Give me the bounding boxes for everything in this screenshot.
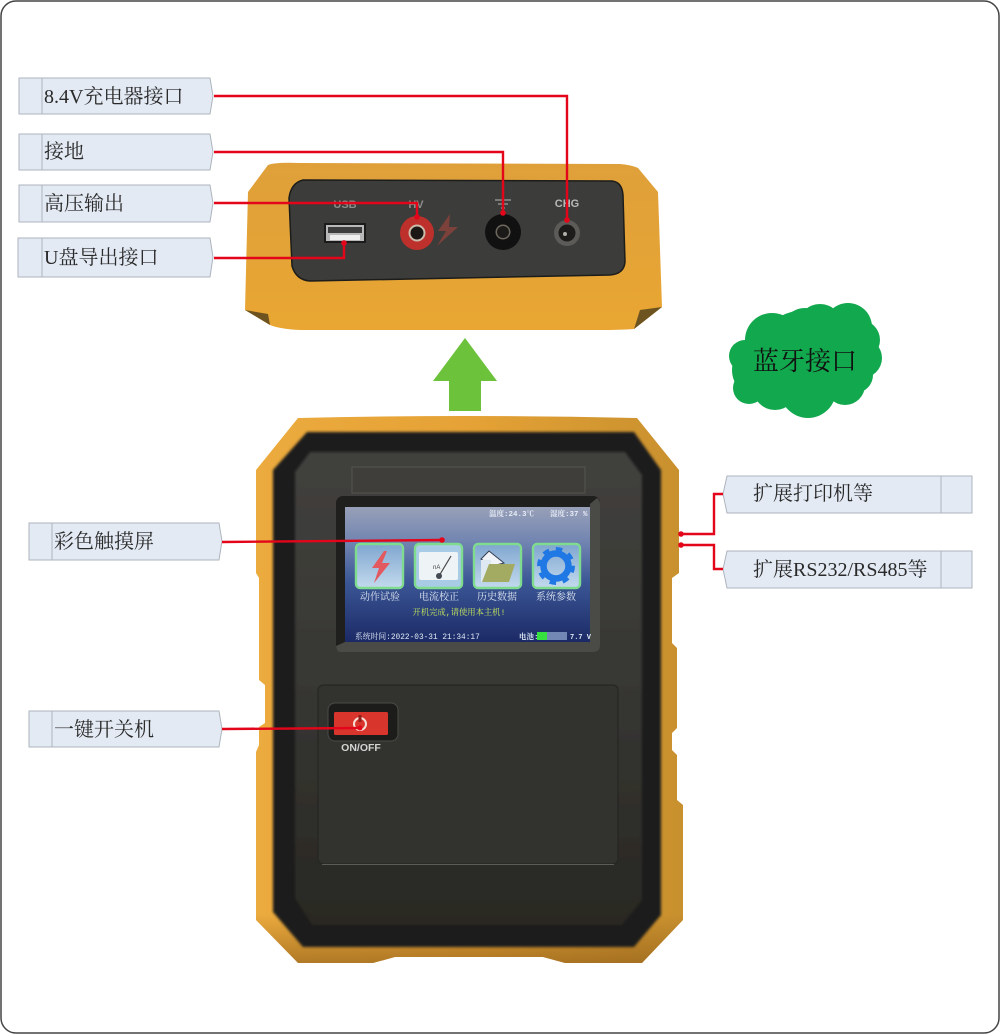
CHG jack bbox=[554, 220, 580, 246]
ground jack bbox=[485, 214, 521, 250]
callout: colour touch screen bbox=[29, 523, 222, 560]
screen background bbox=[345, 507, 590, 642]
housing lower shade bbox=[256, 800, 683, 963]
menu label: current calibration: 电流校正 bbox=[419, 590, 459, 604]
callout: USB export port: U盘导出接口 bbox=[44, 246, 158, 269]
cloud shape bbox=[729, 303, 882, 418]
leader line: touch screen bbox=[222, 537, 445, 543]
callout: colour touch screen: 彩色触摸屏 bbox=[54, 530, 154, 553]
callout: printer expansion: 扩展打印机等 bbox=[753, 482, 873, 505]
ground symbol bbox=[495, 200, 511, 208]
touch screen bbox=[345, 507, 592, 642]
USB port bbox=[324, 223, 366, 243]
menu label: history data: 历史数据 bbox=[477, 590, 517, 604]
leader line: printer bbox=[678, 494, 723, 537]
bezel lit right and bottom edges bbox=[336, 498, 600, 652]
lighter front face bbox=[295, 452, 642, 925]
callout: 8.4V charger port: 8.4V充电器接口 bbox=[44, 85, 183, 108]
dark inner body bbox=[273, 432, 661, 947]
cloud: bluetooth interface bbox=[729, 303, 882, 418]
HV label: HV bbox=[408, 199, 424, 211]
icon: action test bbox=[356, 544, 403, 588]
leader line: ground bbox=[214, 152, 506, 216]
battery label: 电池: bbox=[519, 631, 539, 642]
callout: power key: 一键开关机 bbox=[54, 718, 154, 741]
leader line: RS232/RS485 bbox=[678, 542, 723, 569]
power button bbox=[328, 703, 398, 754]
USB label: USB bbox=[333, 199, 357, 211]
HV red jack bbox=[400, 216, 434, 250]
housing corner shade bbox=[245, 307, 662, 329]
callout: high voltage output: 高压输出 bbox=[44, 192, 124, 215]
menu label: system settings: 系统参数 bbox=[536, 590, 576, 604]
temperature readout: 温度:24.3℃ bbox=[489, 508, 534, 519]
cloud text: 蓝牙接口 bbox=[753, 347, 857, 376]
icon: current calibration bbox=[415, 544, 462, 588]
screen bezel bbox=[336, 496, 600, 652]
orange rubber housing bbox=[245, 163, 662, 330]
leader line: USB bbox=[214, 240, 347, 258]
lower inset panel bbox=[318, 685, 618, 864]
callout: ground: 接地 bbox=[44, 140, 84, 163]
top label slot bbox=[352, 467, 585, 493]
callout: RS232/RS485 expansion bbox=[723, 551, 972, 588]
main device photo bbox=[256, 416, 683, 963]
battery voltage: 7.7 V bbox=[570, 634, 592, 642]
status message: 开机完成,请使用本主机! bbox=[413, 607, 505, 618]
button bezel bbox=[328, 703, 398, 741]
callout: ground bbox=[19, 134, 213, 170]
system time: 系统时间:2022-03-31 21:34:17 bbox=[355, 631, 480, 642]
callout: 8.4V charger port bbox=[19, 78, 213, 114]
callout: RS232/RS485 expansion: 扩展RS232/RS485等 bbox=[753, 558, 927, 581]
callout: USB export port bbox=[18, 238, 213, 277]
CHG label: CHG bbox=[555, 198, 579, 210]
ON/OFF label: ON/OFF bbox=[341, 742, 381, 754]
connector plate bbox=[289, 180, 625, 281]
icon: current calibration: nA bbox=[433, 565, 440, 571]
menu label: action test: 动作试验 bbox=[360, 590, 400, 604]
humidity readout: 湿度:37 % bbox=[550, 508, 588, 519]
callout: printer expansion bbox=[723, 476, 972, 513]
leader line: charger bbox=[214, 96, 570, 223]
upward green arrow bbox=[433, 338, 497, 411]
callout: power key bbox=[29, 711, 222, 747]
lightning mark bbox=[437, 214, 458, 246]
icon: history data bbox=[474, 544, 521, 588]
leader line: high voltage bbox=[214, 203, 420, 220]
device rear panel photo bbox=[245, 163, 662, 330]
power symbol bbox=[354, 715, 366, 730]
inset panel lower highlight bbox=[322, 864, 614, 866]
icon: system settings bbox=[533, 544, 580, 588]
red key bbox=[334, 712, 388, 735]
orange outer housing bbox=[256, 416, 683, 963]
leader line: power key bbox=[222, 726, 362, 730]
battery gauge bbox=[537, 632, 567, 640]
callout: high voltage output bbox=[19, 185, 213, 222]
